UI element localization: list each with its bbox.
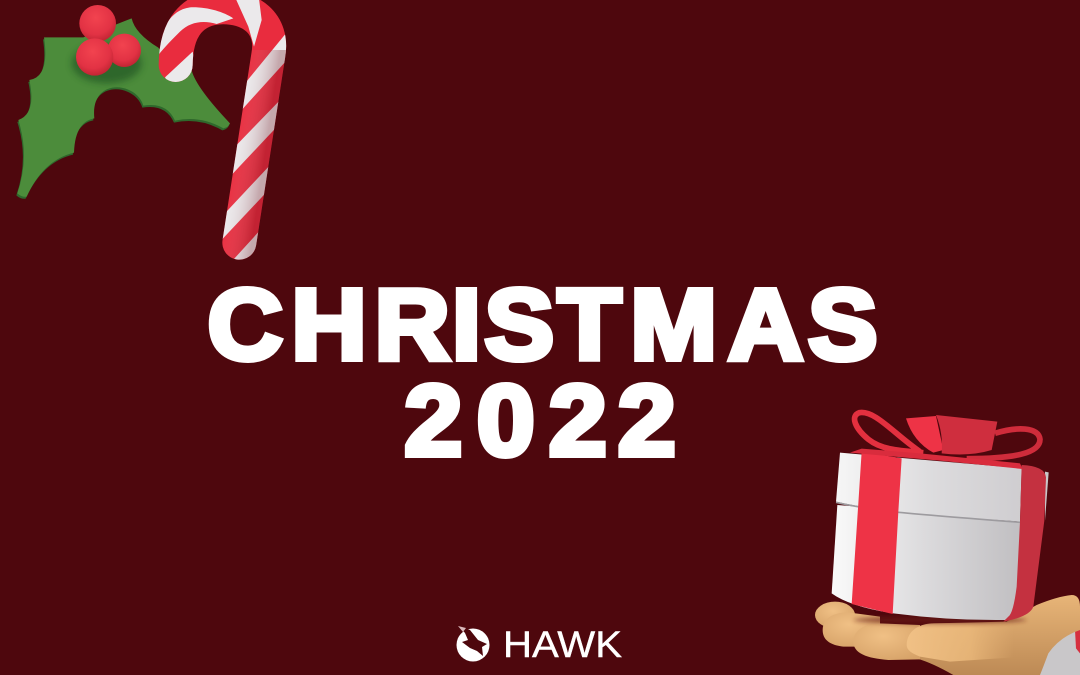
icon: candy cane	[157, 0, 293, 263]
gift bow knot	[906, 415, 997, 454]
cane white stripes	[157, 0, 290, 263]
icon: hand holding gift box	[815, 412, 1080, 675]
title line: 2022: 2022	[404, 365, 676, 477]
cane shading	[223, 50, 286, 260]
logo: Hawk	[456, 624, 622, 665]
sleeve	[1038, 629, 1080, 675]
gift box body	[832, 505, 1033, 620]
gift box lid	[836, 453, 1049, 522]
logo mark	[456, 626, 490, 662]
title	[208, 269, 878, 477]
title line: Christmas: CHRISTMAS	[208, 269, 878, 381]
gift bow loops	[855, 412, 1040, 459]
icon: holly leaf with berries	[16, 5, 230, 199]
hand	[815, 595, 1080, 675]
logo wordmark: HAWK	[503, 624, 622, 665]
ribbon	[850, 449, 1046, 622]
berries	[76, 5, 141, 76]
holly leaf	[16, 18, 230, 199]
